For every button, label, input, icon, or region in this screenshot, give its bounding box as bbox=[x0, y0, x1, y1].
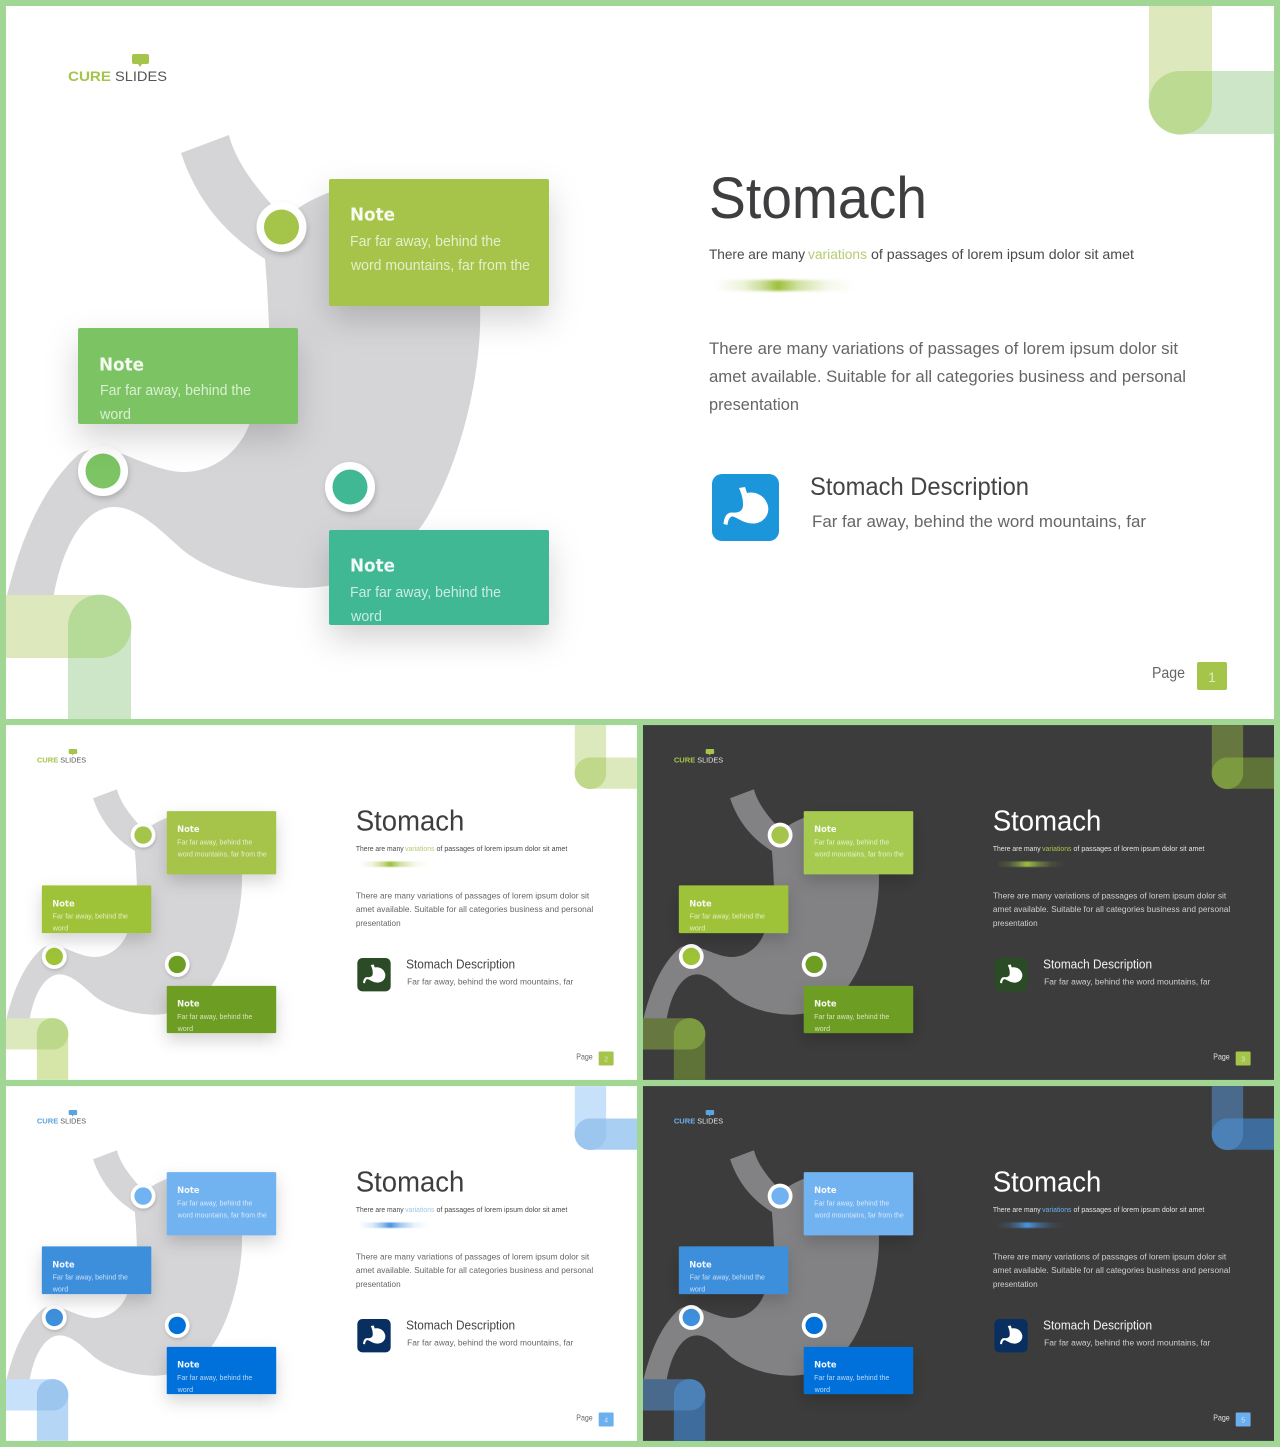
slide 2: small light green bbox=[6, 725, 637, 1080]
description: Far far away, behind the word mountains, far bbox=[812, 513, 1147, 531]
note 2: Far far away, behind the bbox=[690, 1273, 765, 1282]
note 1: Note bbox=[814, 1186, 837, 1196]
paragraph: amet available. Suitable for all categories business and personal bbox=[709, 367, 1186, 386]
subtitle: There are many bbox=[356, 1207, 404, 1214]
note 3: Far far away, behind the bbox=[350, 585, 501, 601]
marker 3 bbox=[802, 952, 827, 977]
description: Far far away, behind the word mountains, far bbox=[407, 1338, 574, 1347]
note 3 bbox=[167, 986, 276, 1033]
logo: SLIDES bbox=[697, 757, 723, 764]
note 2 bbox=[679, 1246, 788, 1294]
logo: CURE bbox=[674, 1118, 696, 1125]
logo: SLIDES bbox=[115, 68, 167, 84]
bottom left decoration bbox=[6, 594, 132, 719]
description: Stomach Description bbox=[406, 1318, 515, 1332]
subtitle: variations bbox=[405, 846, 435, 853]
paragraph: amet available. Suitable for all categories business and personal bbox=[993, 904, 1230, 914]
marker 2 bbox=[78, 446, 128, 496]
note 3: Note bbox=[814, 1361, 837, 1371]
paragraph: presentation bbox=[709, 395, 799, 414]
gradient underline bbox=[715, 280, 855, 291]
top right decoration bbox=[1212, 1086, 1274, 1150]
slide 5: small dark blue bbox=[643, 1086, 1274, 1441]
note 1: Far far away, behind the bbox=[814, 1199, 889, 1208]
logo bbox=[68, 54, 167, 84]
note 2 bbox=[78, 328, 298, 424]
subtitle bbox=[356, 846, 567, 853]
subtitle bbox=[356, 1207, 567, 1214]
note 1 bbox=[167, 811, 276, 874]
description: Far far away, behind the word mountains, far bbox=[1044, 1338, 1211, 1347]
note 1: Note bbox=[177, 825, 200, 835]
paragraph: There are many variations of passages of lorem ipsum dolor sit bbox=[993, 1251, 1227, 1261]
gradient underline bbox=[359, 861, 428, 867]
icon: stomach bbox=[994, 1319, 1028, 1352]
marker 2 bbox=[679, 1305, 704, 1330]
note 1 bbox=[167, 1172, 276, 1235]
note 1: Far far away, behind the bbox=[177, 1199, 252, 1208]
page number: 5 bbox=[1241, 1417, 1245, 1424]
title: Stomach bbox=[993, 1167, 1101, 1199]
note 2: Note bbox=[52, 899, 75, 909]
page number: Page bbox=[1152, 665, 1185, 682]
paragraph bbox=[356, 890, 593, 928]
logo bbox=[674, 749, 723, 764]
paragraph: There are many variations of passages of lorem ipsum dolor sit bbox=[356, 890, 590, 900]
title: Stomach bbox=[356, 806, 464, 838]
slide 3: small dark green bbox=[643, 725, 1274, 1080]
paragraph: There are many variations of passages of lorem ipsum dolor sit bbox=[709, 339, 1178, 358]
paragraph bbox=[709, 339, 1186, 414]
note 3: word bbox=[177, 1024, 193, 1033]
gradient underline bbox=[996, 861, 1065, 867]
description bbox=[1043, 957, 1211, 986]
logo: CURE bbox=[68, 68, 111, 84]
bottom left decoration bbox=[6, 1018, 68, 1080]
marker 1 bbox=[131, 823, 156, 848]
title: Stomach bbox=[709, 166, 927, 231]
subtitle: of passages of lorem ipsum dolor sit amet bbox=[436, 1207, 567, 1214]
bottom left decoration bbox=[6, 1379, 68, 1441]
note 2: Far far away, behind the bbox=[53, 912, 128, 921]
paragraph: There are many variations of passages of lorem ipsum dolor sit bbox=[356, 1251, 590, 1261]
bottom left decoration bbox=[643, 1018, 705, 1080]
note 3: Note bbox=[350, 556, 395, 576]
marker 3 bbox=[165, 1313, 190, 1338]
note 3: word bbox=[814, 1024, 830, 1033]
logo: CURE bbox=[674, 757, 696, 764]
paragraph: presentation bbox=[993, 1279, 1038, 1289]
page number bbox=[1213, 1413, 1251, 1426]
icon: stomach bbox=[357, 958, 391, 991]
description: Stomach Description bbox=[406, 957, 515, 971]
note 2: word bbox=[52, 1285, 68, 1294]
note 1: Note bbox=[814, 825, 837, 835]
marker 3 bbox=[802, 1313, 827, 1338]
description bbox=[406, 1318, 574, 1347]
note 1: Note bbox=[350, 206, 395, 226]
logo: SLIDES bbox=[60, 757, 86, 764]
paragraph: presentation bbox=[993, 918, 1038, 928]
logo bbox=[674, 1110, 723, 1125]
description: Stomach Description bbox=[1043, 957, 1152, 971]
subtitle: There are many bbox=[709, 246, 805, 262]
note 1: word mountains, far from the bbox=[350, 258, 530, 274]
page number: 4 bbox=[604, 1417, 608, 1424]
note 2: Note bbox=[52, 1260, 75, 1270]
paragraph: amet available. Suitable for all categories business and personal bbox=[356, 1265, 593, 1275]
subtitle bbox=[993, 1207, 1204, 1214]
note 1: word mountains, far from the bbox=[177, 1210, 267, 1219]
top right decoration bbox=[1212, 725, 1274, 789]
page number: 1 bbox=[1208, 669, 1216, 685]
note 2: word bbox=[689, 1285, 705, 1294]
page number: Page bbox=[1213, 1414, 1230, 1423]
page number bbox=[576, 1413, 614, 1426]
page number: 3 bbox=[1241, 1056, 1245, 1063]
stomach shape bbox=[643, 1150, 879, 1382]
marker 2 bbox=[679, 944, 704, 969]
note 2: Note bbox=[99, 356, 144, 376]
note 2: word bbox=[52, 924, 68, 933]
slide 1: large light green bbox=[6, 6, 1274, 719]
subtitle: variations bbox=[808, 246, 867, 262]
icon: stomach bbox=[357, 1319, 391, 1352]
paragraph: amet available. Suitable for all categories business and personal bbox=[993, 1265, 1230, 1275]
subtitle: variations bbox=[405, 1207, 435, 1214]
note 3: word bbox=[350, 609, 382, 625]
note 2: Far far away, behind the bbox=[100, 383, 251, 399]
subtitle: variations bbox=[1042, 846, 1072, 853]
note 3: word bbox=[814, 1385, 830, 1394]
description: Stomach Description bbox=[1043, 1318, 1152, 1332]
note 3: Note bbox=[814, 1000, 837, 1010]
paragraph bbox=[993, 890, 1230, 928]
top right decoration bbox=[1149, 6, 1274, 134]
note 3: word bbox=[177, 1385, 193, 1394]
note 2: Note bbox=[689, 1260, 712, 1270]
page number: 2 bbox=[604, 1056, 608, 1063]
description bbox=[810, 473, 1147, 531]
page number bbox=[1152, 662, 1227, 690]
note 2: word bbox=[99, 407, 131, 423]
slide 4: small light blue bbox=[6, 1086, 637, 1441]
paragraph: presentation bbox=[356, 918, 401, 928]
page number: Page bbox=[576, 1053, 593, 1062]
note 1: Far far away, behind the bbox=[814, 838, 889, 847]
marker 2 bbox=[42, 1305, 67, 1330]
paragraph: There are many variations of passages of lorem ipsum dolor sit bbox=[993, 890, 1227, 900]
subtitle: of passages of lorem ipsum dolor sit amet bbox=[1073, 846, 1204, 853]
subtitle: variations bbox=[1042, 1207, 1072, 1214]
marker 1 bbox=[768, 823, 793, 848]
logo bbox=[37, 1110, 86, 1125]
stomach shape bbox=[643, 789, 879, 1021]
marker 2 bbox=[42, 944, 67, 969]
logo: CURE bbox=[37, 1118, 59, 1125]
note 2: Note bbox=[689, 899, 712, 909]
note 1: word mountains, far from the bbox=[177, 849, 267, 858]
note 2: Far far away, behind the bbox=[690, 912, 765, 921]
note 2 bbox=[679, 885, 788, 933]
paragraph bbox=[993, 1251, 1230, 1289]
top right decoration bbox=[575, 725, 637, 789]
logo bbox=[37, 749, 86, 764]
description: Far far away, behind the word mountains, far bbox=[407, 977, 574, 986]
note 3: Far far away, behind the bbox=[814, 1012, 889, 1021]
subtitle: of passages of lorem ipsum dolor sit amet bbox=[436, 846, 567, 853]
note 3 bbox=[804, 986, 913, 1033]
paragraph: presentation bbox=[356, 1279, 401, 1289]
icon: stomach bbox=[994, 958, 1028, 991]
gradient underline bbox=[359, 1222, 428, 1228]
note 3: Far far away, behind the bbox=[177, 1012, 252, 1021]
marker 3 bbox=[325, 462, 375, 512]
bottom left decoration bbox=[643, 1379, 705, 1441]
note 3: Far far away, behind the bbox=[814, 1373, 889, 1382]
title: Stomach bbox=[356, 1167, 464, 1199]
subtitle: of passages of lorem ipsum dolor sit amet bbox=[1073, 1207, 1204, 1214]
logo: SLIDES bbox=[697, 1118, 723, 1125]
page number: Page bbox=[1213, 1053, 1230, 1062]
title: Stomach bbox=[993, 806, 1101, 838]
note 3 bbox=[329, 530, 549, 625]
note 2 bbox=[42, 885, 151, 933]
note 1: word mountains, far from the bbox=[814, 849, 904, 858]
page number bbox=[576, 1052, 614, 1065]
note 3 bbox=[804, 1347, 913, 1394]
marker 1 bbox=[768, 1184, 793, 1209]
note 3: Note bbox=[177, 1361, 200, 1371]
icon: stomach bbox=[712, 474, 779, 541]
description bbox=[406, 957, 574, 986]
logo: CURE bbox=[37, 757, 59, 764]
subtitle: There are many bbox=[356, 846, 404, 853]
gradient underline bbox=[996, 1222, 1065, 1228]
description: Far far away, behind the word mountains, far bbox=[1044, 977, 1211, 986]
paragraph bbox=[356, 1251, 593, 1289]
subtitle bbox=[709, 246, 1134, 262]
description: Stomach Description bbox=[810, 473, 1029, 501]
note 1: Far far away, behind the bbox=[177, 838, 252, 847]
note 1: Note bbox=[177, 1186, 200, 1196]
page number bbox=[1213, 1052, 1251, 1065]
note 3: Far far away, behind the bbox=[177, 1373, 252, 1382]
marker 1 bbox=[256, 202, 306, 252]
note 2 bbox=[42, 1246, 151, 1294]
logo: SLIDES bbox=[60, 1118, 86, 1125]
stomach shape bbox=[6, 135, 480, 600]
note 1 bbox=[329, 179, 549, 306]
note 1: Far far away, behind the bbox=[350, 234, 501, 250]
note 3: Note bbox=[177, 1000, 200, 1010]
description bbox=[1043, 1318, 1211, 1347]
paragraph: amet available. Suitable for all categories business and personal bbox=[356, 904, 593, 914]
stomach shape bbox=[6, 1150, 242, 1382]
note 1 bbox=[804, 1172, 913, 1235]
top right decoration bbox=[575, 1086, 637, 1150]
note 1: word mountains, far from the bbox=[814, 1210, 904, 1219]
stomach shape bbox=[6, 789, 242, 1021]
note 3 bbox=[167, 1347, 276, 1394]
subtitle bbox=[993, 846, 1204, 853]
subtitle: There are many bbox=[993, 846, 1041, 853]
note 2: Far far away, behind the bbox=[53, 1273, 128, 1282]
marker 1 bbox=[131, 1184, 156, 1209]
note 1 bbox=[804, 811, 913, 874]
subtitle: There are many bbox=[993, 1207, 1041, 1214]
note 2: word bbox=[689, 924, 705, 933]
page number: Page bbox=[576, 1414, 593, 1423]
marker 3 bbox=[165, 952, 190, 977]
subtitle: of passages of lorem ipsum dolor sit amet bbox=[871, 246, 1134, 262]
